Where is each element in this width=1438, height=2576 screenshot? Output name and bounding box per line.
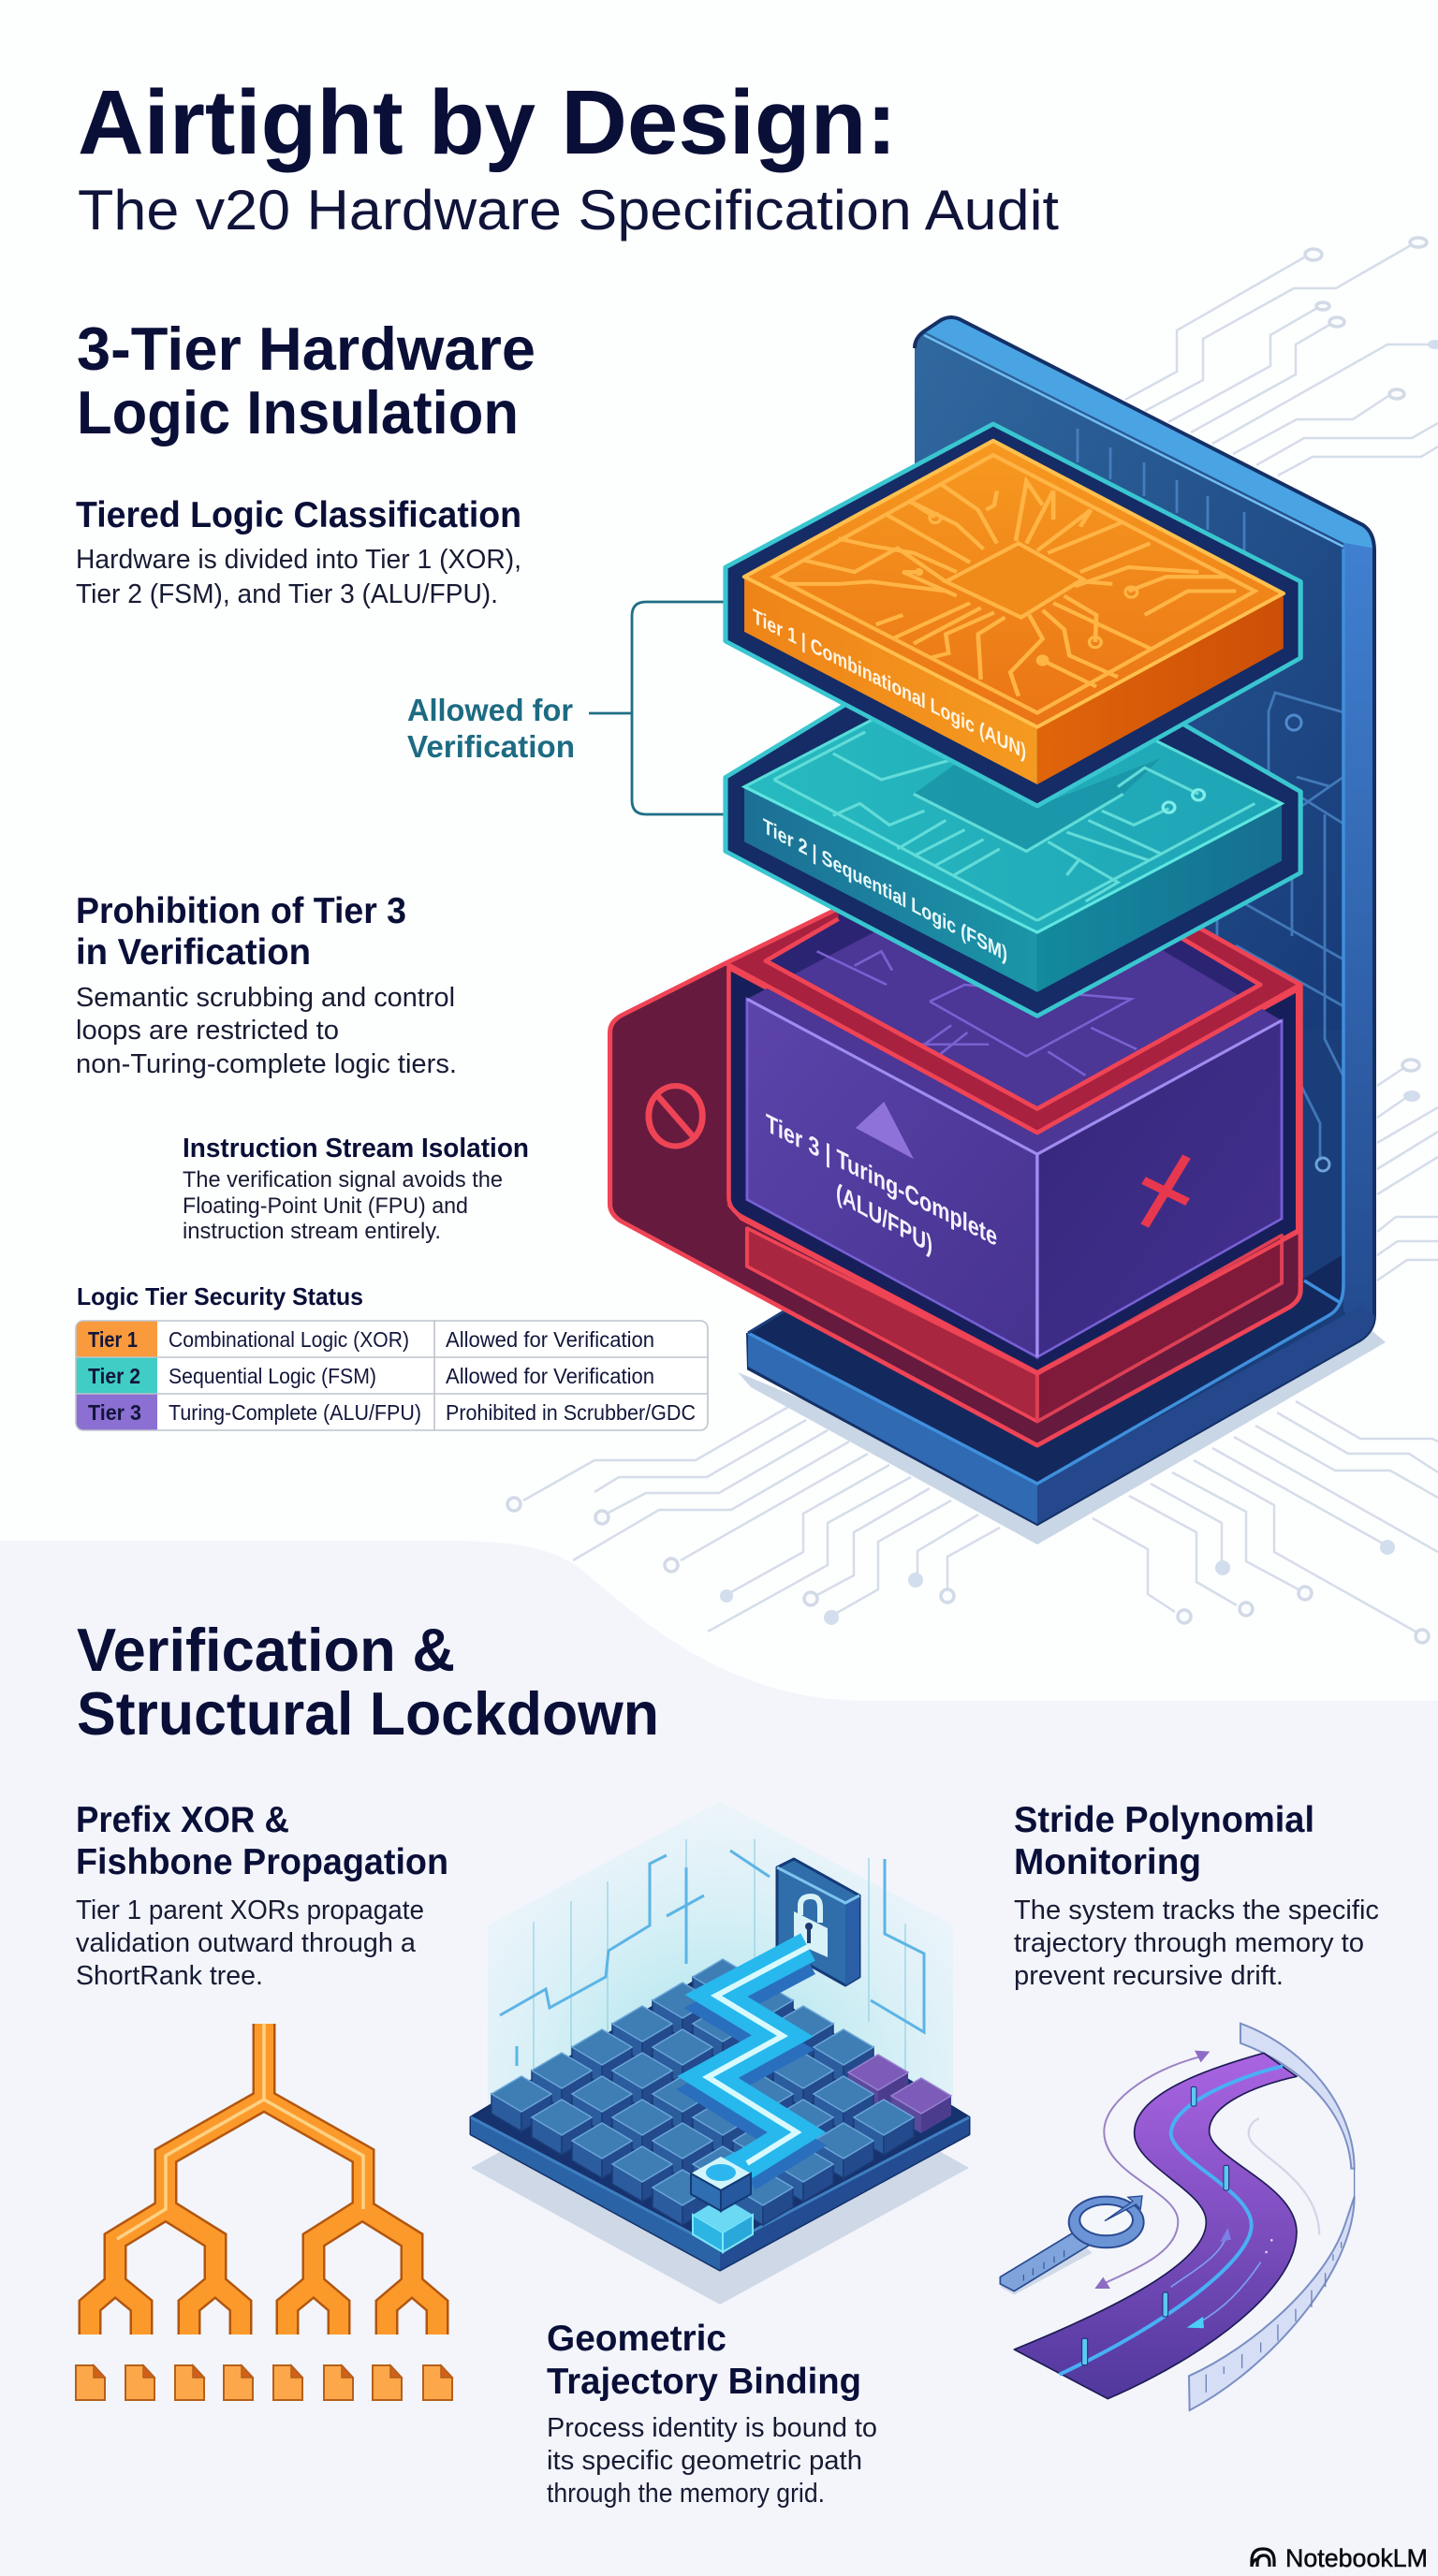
- text block: tiered logic classification: Hardware is divided into Tier 1 (XOR),: [76, 545, 521, 575]
- heading: 3-Tier Hardware Logic Insulation: [77, 315, 536, 446]
- allowed for verification callout with bracket: Allowed for: [407, 693, 573, 727]
- text block: prohibition of tier 3: non-Turing-complete logic tiers.: [76, 1049, 457, 1079]
- text block: stride polynomial monitoring: trajectory through memory to: [1014, 1928, 1364, 1958]
- tier 3 housing and box: [610, 832, 1300, 1445]
- text block: instruction stream isolation: [183, 1134, 529, 1244]
- text block: prohibition of tier 3: Semantic scrubbing and control: [76, 983, 455, 1013]
- text block: prefix xor and fishbone propagation: [76, 1800, 448, 1991]
- tier 3 label: (ALU/FPU): [836, 1178, 932, 1260]
- icon: triangle: [856, 1102, 914, 1159]
- tier 1 label: Tier 1 | Combinational Logic (AUN): [753, 604, 1026, 764]
- allowed for verification callout with bracket: [407, 602, 726, 814]
- illustration: memory grid with locked trajectory: [471, 1802, 969, 2305]
- text block: prohibition of tier 3: in Verification: [76, 932, 311, 973]
- text block: stride polynomial monitoring: Monitoring: [1014, 1842, 1201, 1882]
- text block: geometric trajectory binding: Process identity is bound to: [547, 2413, 877, 2443]
- heading: 3-Tier Hardware Logic Insulation: 3-Tier Hardware: [77, 315, 536, 383]
- icon: no entry: [649, 1086, 702, 1146]
- panel circuit lines: [1078, 429, 1343, 1161]
- window backing behind rim: [726, 832, 1300, 1133]
- heading: 3-Tier Hardware Logic Insulation: Logic Insulation: [77, 378, 519, 446]
- text block: tiered logic classification: Tiered Logic Classification: [76, 495, 521, 535]
- lock panel: [777, 1859, 859, 1985]
- icon: orange fishbone tree: [90, 2024, 437, 2334]
- lower tray: [747, 1228, 1282, 1422]
- text block: stride polynomial monitoring: The system tracks the specific: [1014, 1895, 1379, 1925]
- text block: geometric trajectory binding: through the memory grid.: [547, 2479, 825, 2509]
- isometric hardware stack illustration: [610, 317, 1386, 1544]
- base shadow: [738, 1310, 1386, 1544]
- table rows: Allowed for Verification: [446, 1327, 654, 1352]
- tier 2 label: Tier 2 | Sequential Logic (FSM): [763, 813, 1007, 966]
- table rows: Allowed for Verification: [446, 1364, 654, 1388]
- table rows: Tier 3: [88, 1400, 141, 1425]
- text block: stride polynomial monitoring: prevent recursive drift.: [1014, 1961, 1284, 1991]
- text block: geometric trajectory binding: its specific geometric path: [547, 2446, 862, 2476]
- road markers: [1082, 2086, 1229, 2365]
- table rows: Sequential Logic (FSM): [169, 1364, 376, 1388]
- text block: geometric trajectory binding: [547, 2319, 877, 2509]
- heading: verification and structural lockdown: Verification &: [77, 1616, 455, 1684]
- text block: prefix xor and fishbone propagation: Prefix XOR &: [76, 1800, 289, 1840]
- tier 2 board: [726, 615, 1300, 1016]
- red prohibition wing: [610, 963, 1300, 1445]
- icon: red cross: [1144, 1157, 1188, 1226]
- text block: prohibition of tier 3: [76, 891, 457, 1079]
- road centre line and arrows: [1060, 2066, 1283, 2375]
- heading: verification and structural lockdown: [77, 1616, 659, 1748]
- text block: stride polynomial monitoring: [1014, 1800, 1379, 1991]
- base plate: [471, 1966, 969, 2270]
- tier 3 label: Tier 3 | Turing-Complete: [766, 1108, 997, 1252]
- icon: leaf documents: [76, 2365, 452, 2400]
- title: Airtight by Design:: [78, 71, 897, 173]
- tier 3 top face: [747, 860, 1282, 1154]
- glass wall: [488, 1802, 953, 2247]
- curved ruler: [1189, 2024, 1355, 2410]
- navy interior: [728, 968, 1298, 1372]
- heading: verification and structural lockdown: Structural Lockdown: [77, 1679, 659, 1748]
- subtitle: The v20 Hardware Specification Audit: [78, 179, 1059, 242]
- table rows: Turing-Complete (ALU/FPU): [169, 1400, 421, 1425]
- table rows: [76, 1321, 708, 1430]
- table rows: Tier 2: [88, 1364, 140, 1388]
- chip traces: [774, 455, 1255, 713]
- text block: prohibition of tier 3: loops are restricted to: [76, 1016, 339, 1046]
- text block: tiered logic classification: [76, 495, 521, 609]
- text block: instruction stream isolation: Floating-Point Unit (FPU) and: [183, 1193, 468, 1219]
- tier 3 box faces: [747, 999, 1037, 1357]
- text block: prefix xor and fishbone propagation: Fishbone Propagation: [76, 1842, 448, 1882]
- table rows: Prohibited in Scrubber/GDC: [446, 1400, 696, 1425]
- glowing trajectory path: [708, 1947, 808, 2176]
- table heading: Logic Tier Security Status: [77, 1282, 363, 1310]
- text block: prohibition of tier 3: Prohibition of Tier 3: [76, 891, 406, 931]
- text block: prefix xor and fishbone propagation: ShortRank tree.: [76, 1961, 263, 1991]
- purple road: [1014, 2053, 1297, 2399]
- start block: [691, 2157, 751, 2211]
- tier 1 board: [726, 424, 1300, 806]
- text block: prefix xor and fishbone propagation: Tier 1 parent XORs propagate: [76, 1895, 424, 1925]
- text block: instruction stream isolation: Instruction Stream Isolation: [183, 1134, 529, 1164]
- base plate: [748, 549, 1374, 1524]
- icon: padlock: [794, 1911, 828, 1957]
- circuit traces: right middle: [1377, 1060, 1438, 1281]
- circuit traces: top right: [1125, 238, 1438, 476]
- text block: instruction stream isolation: instruction stream entirely.: [183, 1219, 441, 1244]
- text block: stride polynomial monitoring: Stride Polynomial: [1014, 1800, 1314, 1840]
- trajectory arrows: [1103, 2056, 1203, 2284]
- allowed for verification callout with bracket: Verification: [407, 729, 575, 764]
- icon: measuring gauge: [1000, 2196, 1144, 2295]
- table rows: Combinational Logic (XOR): [169, 1327, 409, 1352]
- back circuit panel: [748, 317, 1374, 1524]
- notebooklm logo: NotebookLM: [1285, 2544, 1428, 2572]
- circuit traces: bottom: [507, 1401, 1438, 1643]
- text block: prefix xor and fishbone propagation: validation outward through a: [76, 1928, 417, 1958]
- table: logic tier security status: [76, 1282, 708, 1430]
- text block: tiered logic classification: Tier 2 (FSM), and Tier 3 (ALU/FPU).: [76, 579, 498, 609]
- text block: instruction stream isolation: The verification signal avoids the: [183, 1167, 503, 1193]
- grid shadow: [471, 2097, 969, 2305]
- text block: geometric trajectory binding: Trajectory Binding: [547, 2362, 861, 2402]
- text block: geometric trajectory binding: Geometric: [547, 2319, 726, 2359]
- table rows: Tier 1: [88, 1327, 138, 1352]
- illustration: stride path with ruler and gauge: [1000, 2024, 1355, 2410]
- crimson rim band: [726, 908, 1300, 1133]
- icon: arcs: [1252, 2549, 1274, 2567]
- grid cubes: [492, 1959, 951, 2252]
